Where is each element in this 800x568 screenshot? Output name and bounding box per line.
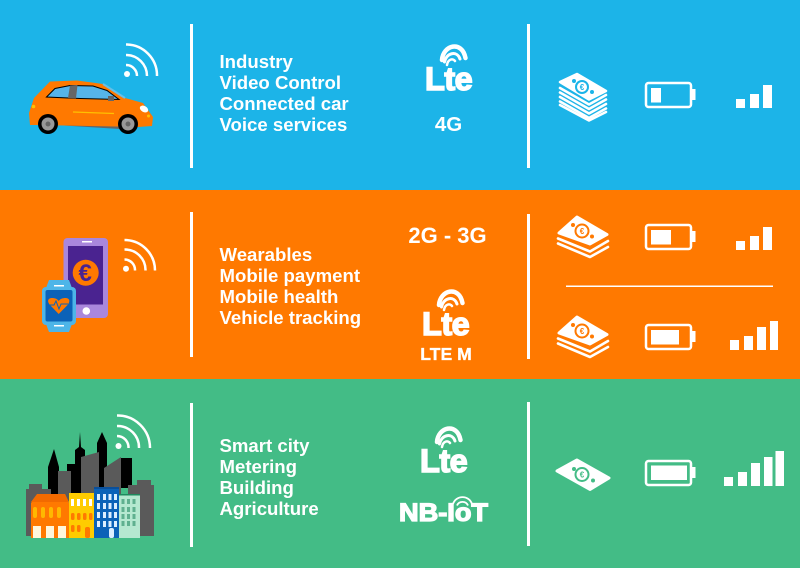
icon: signal bars	[724, 451, 784, 486]
text: use cases: Wearables	[220, 244, 312, 265]
icon: single banknote: €	[580, 470, 585, 480]
icon: signal bars	[736, 85, 772, 108]
text: use cases: Building	[220, 477, 294, 498]
icon: banknotes, medium stack	[558, 217, 608, 257]
label: 4G: 4G	[435, 113, 462, 136]
logo: NB-IoT: NB-IoT	[399, 499, 488, 527]
text: use cases	[220, 244, 361, 328]
panel: 2G-3G and LTE M row	[0, 190, 800, 379]
logo: LTE: Lte	[420, 443, 467, 479]
icon: signal bars	[736, 227, 772, 250]
icon: smartphone and smartwatch	[42, 238, 108, 332]
text: use cases: Vehicle tracking	[220, 307, 361, 328]
logo: LTE: Lte	[422, 306, 469, 342]
icon: wifi signal	[123, 240, 155, 272]
icon: battery half	[646, 225, 696, 249]
icon: smartphone and smartwatch: €	[79, 260, 92, 287]
icon: wifi signal	[116, 415, 150, 449]
text: use cases: Mobile health	[220, 286, 338, 307]
icon: battery full	[646, 461, 696, 485]
panel: NB-IoT row	[0, 379, 800, 568]
icon: banknotes, medium stack	[558, 317, 608, 357]
text: use cases: Smart city	[220, 435, 310, 456]
text: use cases: Mobile payment	[220, 265, 360, 286]
icon: stack of banknotes: €	[580, 83, 585, 92]
icon: banknotes, medium stack: €	[580, 227, 585, 236]
icon: battery low	[646, 83, 696, 107]
icon: banknotes, medium stack: €	[580, 327, 585, 336]
text: use cases	[220, 435, 319, 519]
text: use cases: Voice services	[220, 114, 347, 135]
logo: LTE: Lte	[425, 61, 472, 97]
label: 2G - 3G: 2G - 3G	[408, 223, 487, 248]
panel: 4G row	[0, 0, 800, 190]
icon: battery high	[646, 325, 696, 349]
icon: signal bars	[730, 321, 778, 350]
icon: wifi signal	[124, 44, 157, 77]
icon: car	[29, 80, 153, 134]
icon: single banknote	[557, 460, 609, 490]
label: LTE M: LTE M	[420, 344, 472, 364]
text: use cases: Metering	[220, 456, 297, 477]
text: use cases: Industry	[220, 51, 294, 72]
text: use cases: Video Control	[220, 72, 341, 93]
text: use cases: Agriculture	[220, 498, 319, 519]
icon: city skyline	[26, 432, 154, 538]
text: use cases	[220, 51, 349, 135]
text: use cases: Connected car	[220, 93, 349, 114]
icon: stack of banknotes	[560, 74, 606, 120]
